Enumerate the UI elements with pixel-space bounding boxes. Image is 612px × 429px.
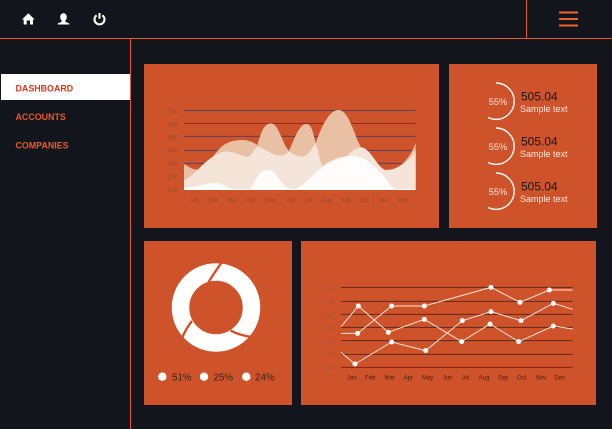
panel: area chart bbox=[144, 64, 439, 228]
y axis labels: 300 bbox=[324, 339, 335, 345]
x axis labels: Jul bbox=[462, 375, 469, 381]
icon: home bbox=[22, 13, 35, 24]
x axis labels: Apr bbox=[404, 375, 413, 381]
gauge row 2: 505.04 bbox=[521, 134, 558, 148]
donut bbox=[180, 262, 252, 343]
x axis labels: Dec bbox=[555, 375, 565, 381]
gauge row 2: 55% bbox=[489, 142, 507, 152]
sidebar navigation bbox=[1, 74, 130, 150]
y axis labels: 500 bbox=[168, 136, 179, 142]
x axis labels: Aug bbox=[479, 375, 489, 381]
gauge row 3: 505.04 bbox=[521, 180, 558, 194]
line series C bbox=[341, 301, 573, 366]
y axis labels: 600 bbox=[168, 122, 179, 128]
x axis labels: Jun bbox=[443, 375, 452, 381]
nav item: dashboard: DASHBOARD bbox=[16, 83, 74, 93]
x axis labels: Aug bbox=[322, 198, 332, 204]
y axis labels: 700 bbox=[168, 109, 179, 115]
gauge row 2 bbox=[488, 128, 568, 164]
x axis labels: May bbox=[422, 375, 433, 381]
y axis labels: 500 bbox=[324, 314, 335, 320]
gauge row 1: 505.04 bbox=[521, 90, 558, 104]
icon: power bbox=[95, 13, 105, 24]
x axis labels: Jun bbox=[286, 198, 295, 204]
x axis labels: Feb bbox=[365, 375, 376, 381]
area series: back bbox=[184, 110, 416, 189]
gauge row 3: 55% bbox=[489, 187, 507, 197]
y axis labels: 300 bbox=[168, 162, 179, 168]
x axis labels: Oct bbox=[517, 375, 527, 381]
gauge row 1: Sample text bbox=[520, 104, 568, 114]
x axis labels: Sep bbox=[498, 375, 509, 381]
x axis labels: Nov bbox=[536, 375, 546, 381]
x axis labels: Jul bbox=[305, 198, 312, 204]
line series B bbox=[341, 285, 573, 336]
x axis labels: Jan bbox=[347, 375, 357, 381]
nav item: companies: COMPANIES bbox=[16, 140, 69, 150]
gauge row 3 bbox=[488, 173, 568, 209]
x axis labels bbox=[190, 198, 408, 204]
panel: donut chart bbox=[144, 241, 292, 405]
legend: 25% bbox=[214, 372, 233, 384]
area series: middle bbox=[184, 143, 416, 189]
panel: gauges bbox=[449, 64, 597, 228]
y axis labels bbox=[168, 109, 179, 194]
x axis labels bbox=[347, 375, 565, 381]
y axis labels: 700 bbox=[324, 288, 335, 294]
legend bbox=[158, 372, 275, 384]
x axis labels: Mar bbox=[385, 375, 395, 381]
y axis labels: 400 bbox=[324, 326, 335, 332]
x axis labels: May bbox=[265, 198, 276, 204]
y axis labels: 400 bbox=[168, 149, 179, 155]
y axis labels: 200 bbox=[324, 353, 335, 359]
panel: line chart bbox=[301, 241, 596, 405]
gauge row 1 bbox=[488, 83, 568, 119]
gauge row 1: 55% bbox=[489, 97, 507, 107]
x axis labels: Sep bbox=[341, 198, 352, 204]
x axis labels: Apr bbox=[247, 198, 256, 204]
x axis labels: Feb bbox=[208, 198, 219, 204]
y axis labels: 200 bbox=[168, 175, 179, 181]
icon: hamburger menu bbox=[559, 12, 578, 26]
gauge row 3: Sample text bbox=[520, 194, 568, 204]
x axis labels: Dec bbox=[398, 198, 408, 204]
x axis labels: Oct bbox=[360, 198, 370, 204]
y axis labels bbox=[324, 288, 335, 372]
x axis labels: Nov bbox=[379, 198, 389, 204]
line series A bbox=[341, 303, 573, 344]
x axis labels: Mar bbox=[227, 198, 237, 204]
gauge row 2: Sample text bbox=[520, 149, 568, 159]
legend: 51% bbox=[172, 372, 192, 384]
legend: 24% bbox=[255, 372, 275, 384]
nav item: accounts: ACCOUNTS bbox=[16, 112, 66, 122]
y axis labels: 600 bbox=[324, 301, 335, 307]
x axis labels: Jan bbox=[190, 198, 199, 204]
icon: user bbox=[58, 13, 69, 25]
y axis labels: 100 bbox=[324, 366, 335, 372]
area series: front bbox=[184, 156, 396, 189]
y axis labels: 100 bbox=[168, 188, 179, 194]
